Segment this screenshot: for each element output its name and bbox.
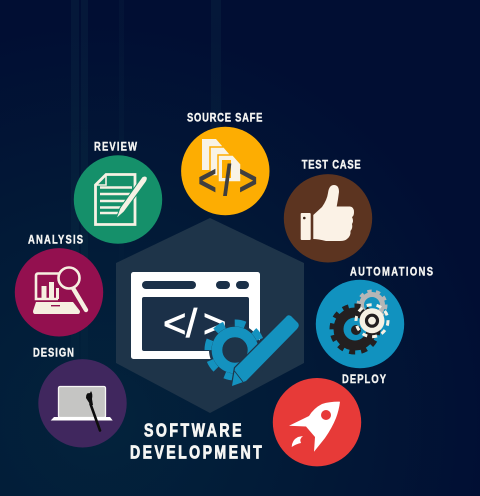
node: test case	[284, 158, 372, 262]
circle	[38, 359, 127, 447]
label: DESIGN	[33, 346, 74, 360]
icon: document and pen	[95, 174, 147, 224]
label: REVIEW	[94, 141, 138, 154]
circle	[284, 174, 372, 262]
icon: rocket	[289, 402, 340, 452]
icon: documents and code: </>	[198, 156, 257, 205]
icon: gears	[332, 291, 388, 352]
title: DEVELOPMENT	[130, 443, 262, 463]
title: SOFTWARE	[144, 421, 242, 441]
circle	[15, 248, 103, 336]
node: deploy	[273, 373, 387, 466]
code window	[131, 272, 260, 359]
code window: </>	[163, 302, 226, 346]
hexagon backdrop	[116, 218, 304, 413]
icon: laptop and brush	[51, 386, 113, 430]
node: analysis	[15, 233, 103, 336]
circle	[273, 378, 361, 466]
circle	[74, 155, 162, 244]
icon: thumbs up	[301, 185, 354, 241]
node: automations	[316, 266, 433, 368]
label: DEPLOY	[342, 373, 387, 386]
pencil	[232, 315, 299, 386]
node: review	[74, 141, 162, 244]
title	[130, 421, 262, 463]
node: source safe	[181, 111, 270, 215]
label: AUTOMATIONS	[350, 266, 433, 279]
node: design	[33, 346, 127, 447]
label: TEST CASE	[302, 158, 361, 172]
gear	[208, 323, 270, 384]
label: ANALYSIS	[28, 233, 83, 247]
label: SOURCE SAFE	[187, 111, 262, 125]
circle	[181, 127, 270, 215]
circle	[316, 280, 404, 368]
central icon: code window with gear and pencil	[131, 272, 299, 386]
icon: chart laptop and magnifier	[33, 268, 86, 314]
